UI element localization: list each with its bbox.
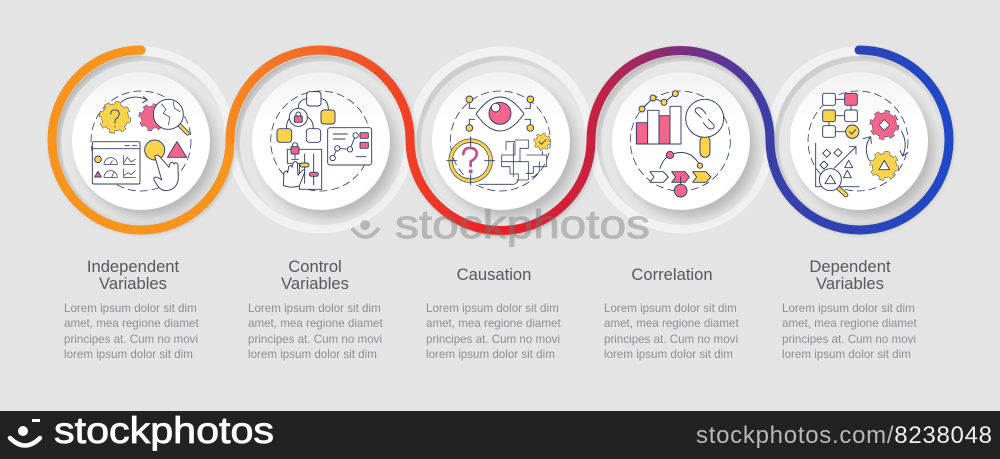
icon: control variables xyxy=(271,91,372,191)
icon: cycle arrows xyxy=(863,131,908,161)
label: control variables: amet, mea regione diamet xyxy=(248,317,383,330)
icon: magnifier xyxy=(153,99,188,133)
icon: correlation xyxy=(630,91,730,197)
label: causation: principes at. Cum no movi xyxy=(426,333,560,346)
footer bar xyxy=(0,410,1000,459)
label: causation: lorem ipsum dolor sit dim xyxy=(426,348,555,361)
footer url: stockphotos.com/8238048 xyxy=(696,422,993,449)
icon: eye xyxy=(476,97,524,131)
icon: pink triangle xyxy=(167,142,187,157)
icon: pointing hand xyxy=(154,155,178,191)
loop ribbon shadow xyxy=(54,52,949,232)
label: dependent variables: lorem ipsum dolor sit dim xyxy=(782,348,911,361)
watermark: stockphotos xyxy=(395,203,650,247)
label: independent variables: lorem ipsum dolor sit dim xyxy=(64,348,193,361)
icon: dashboard xyxy=(92,142,140,184)
icon: flow tree xyxy=(277,92,335,142)
label: control variables: principes at. Cum no movi xyxy=(248,333,382,346)
label: control variables: Control xyxy=(288,257,342,276)
label: causation: amet, mea regione diamet xyxy=(426,317,561,330)
icon: arrow between gears xyxy=(122,97,147,103)
icon: target question xyxy=(447,137,495,185)
label: correlation: Correlation xyxy=(631,265,713,284)
icon: independent variables xyxy=(91,91,372,191)
icon: yellow circle xyxy=(145,140,165,160)
label: independent variables: Lorem ipsum dolor sit dim xyxy=(64,302,197,315)
icon: chevrons xyxy=(650,172,711,182)
label: control variables: Lorem ipsum dolor sit dim xyxy=(248,302,381,315)
icon: chain magnifier xyxy=(686,99,724,157)
icon: chart card xyxy=(328,128,372,165)
label: dependent variables: Variables xyxy=(816,274,884,293)
icon: flow arc xyxy=(660,151,703,168)
label: correlation: amet, mea regione diamet xyxy=(604,317,739,330)
icon: trend line xyxy=(639,91,678,112)
label: control variables xyxy=(248,257,383,361)
icon: flow grid xyxy=(823,93,859,138)
label: causation xyxy=(426,265,561,361)
label: dependent variables: Lorem ipsum dolor sit dim xyxy=(782,302,915,315)
icon: dependent variables xyxy=(808,91,908,195)
label: independent variables: principes at. Cum no movi xyxy=(64,333,198,346)
label: independent variables xyxy=(64,257,199,361)
label: correlation: principes at. Cum no movi xyxy=(604,333,738,346)
label: correlation: Lorem ipsum dolor sit dim xyxy=(604,302,737,315)
icon: pink gear xyxy=(141,106,164,129)
icon: scatter chart xyxy=(816,143,859,187)
label: correlation: lorem ipsum dolor sit dim xyxy=(604,348,733,361)
label: control variables: Variables xyxy=(281,274,349,293)
panel: circle plates xyxy=(52,51,948,229)
icon: maze xyxy=(479,140,547,184)
label: independent variables: Independent xyxy=(87,257,180,276)
label: control variables: lorem ipsum dolor sit dim xyxy=(248,348,377,361)
icon: yellow question gear xyxy=(101,104,129,131)
icon: pink gear with diamond xyxy=(872,113,897,137)
icon: bar chart xyxy=(636,106,681,144)
label: dependent variables: Dependent xyxy=(809,257,891,276)
label: independent variables: amet, mea regione diamet xyxy=(64,317,199,330)
icon: triangle magnifier xyxy=(819,169,846,195)
footer brand: stockphotos xyxy=(54,410,274,451)
icon: footer logo xyxy=(10,419,40,446)
icon: eye nodes xyxy=(466,96,534,131)
icon: causation xyxy=(447,91,730,197)
icon: pink node xyxy=(674,177,687,197)
label: dependent variables: amet, mea regione diamet xyxy=(782,317,917,330)
label: correlation xyxy=(604,265,739,361)
loop ribbon xyxy=(52,50,949,230)
label: independent variables: Variables xyxy=(99,274,167,293)
label: causation: Causation xyxy=(457,265,531,284)
label: dependent variables: principes at. Cum no movi xyxy=(782,333,916,346)
label: dependent variables xyxy=(782,257,917,361)
icon: yellow gear with triangle xyxy=(872,153,897,178)
icon: check badge xyxy=(535,135,549,155)
label: causation: Lorem ipsum dolor sit dim xyxy=(426,302,559,315)
icon: slider panel with hand xyxy=(283,143,322,189)
